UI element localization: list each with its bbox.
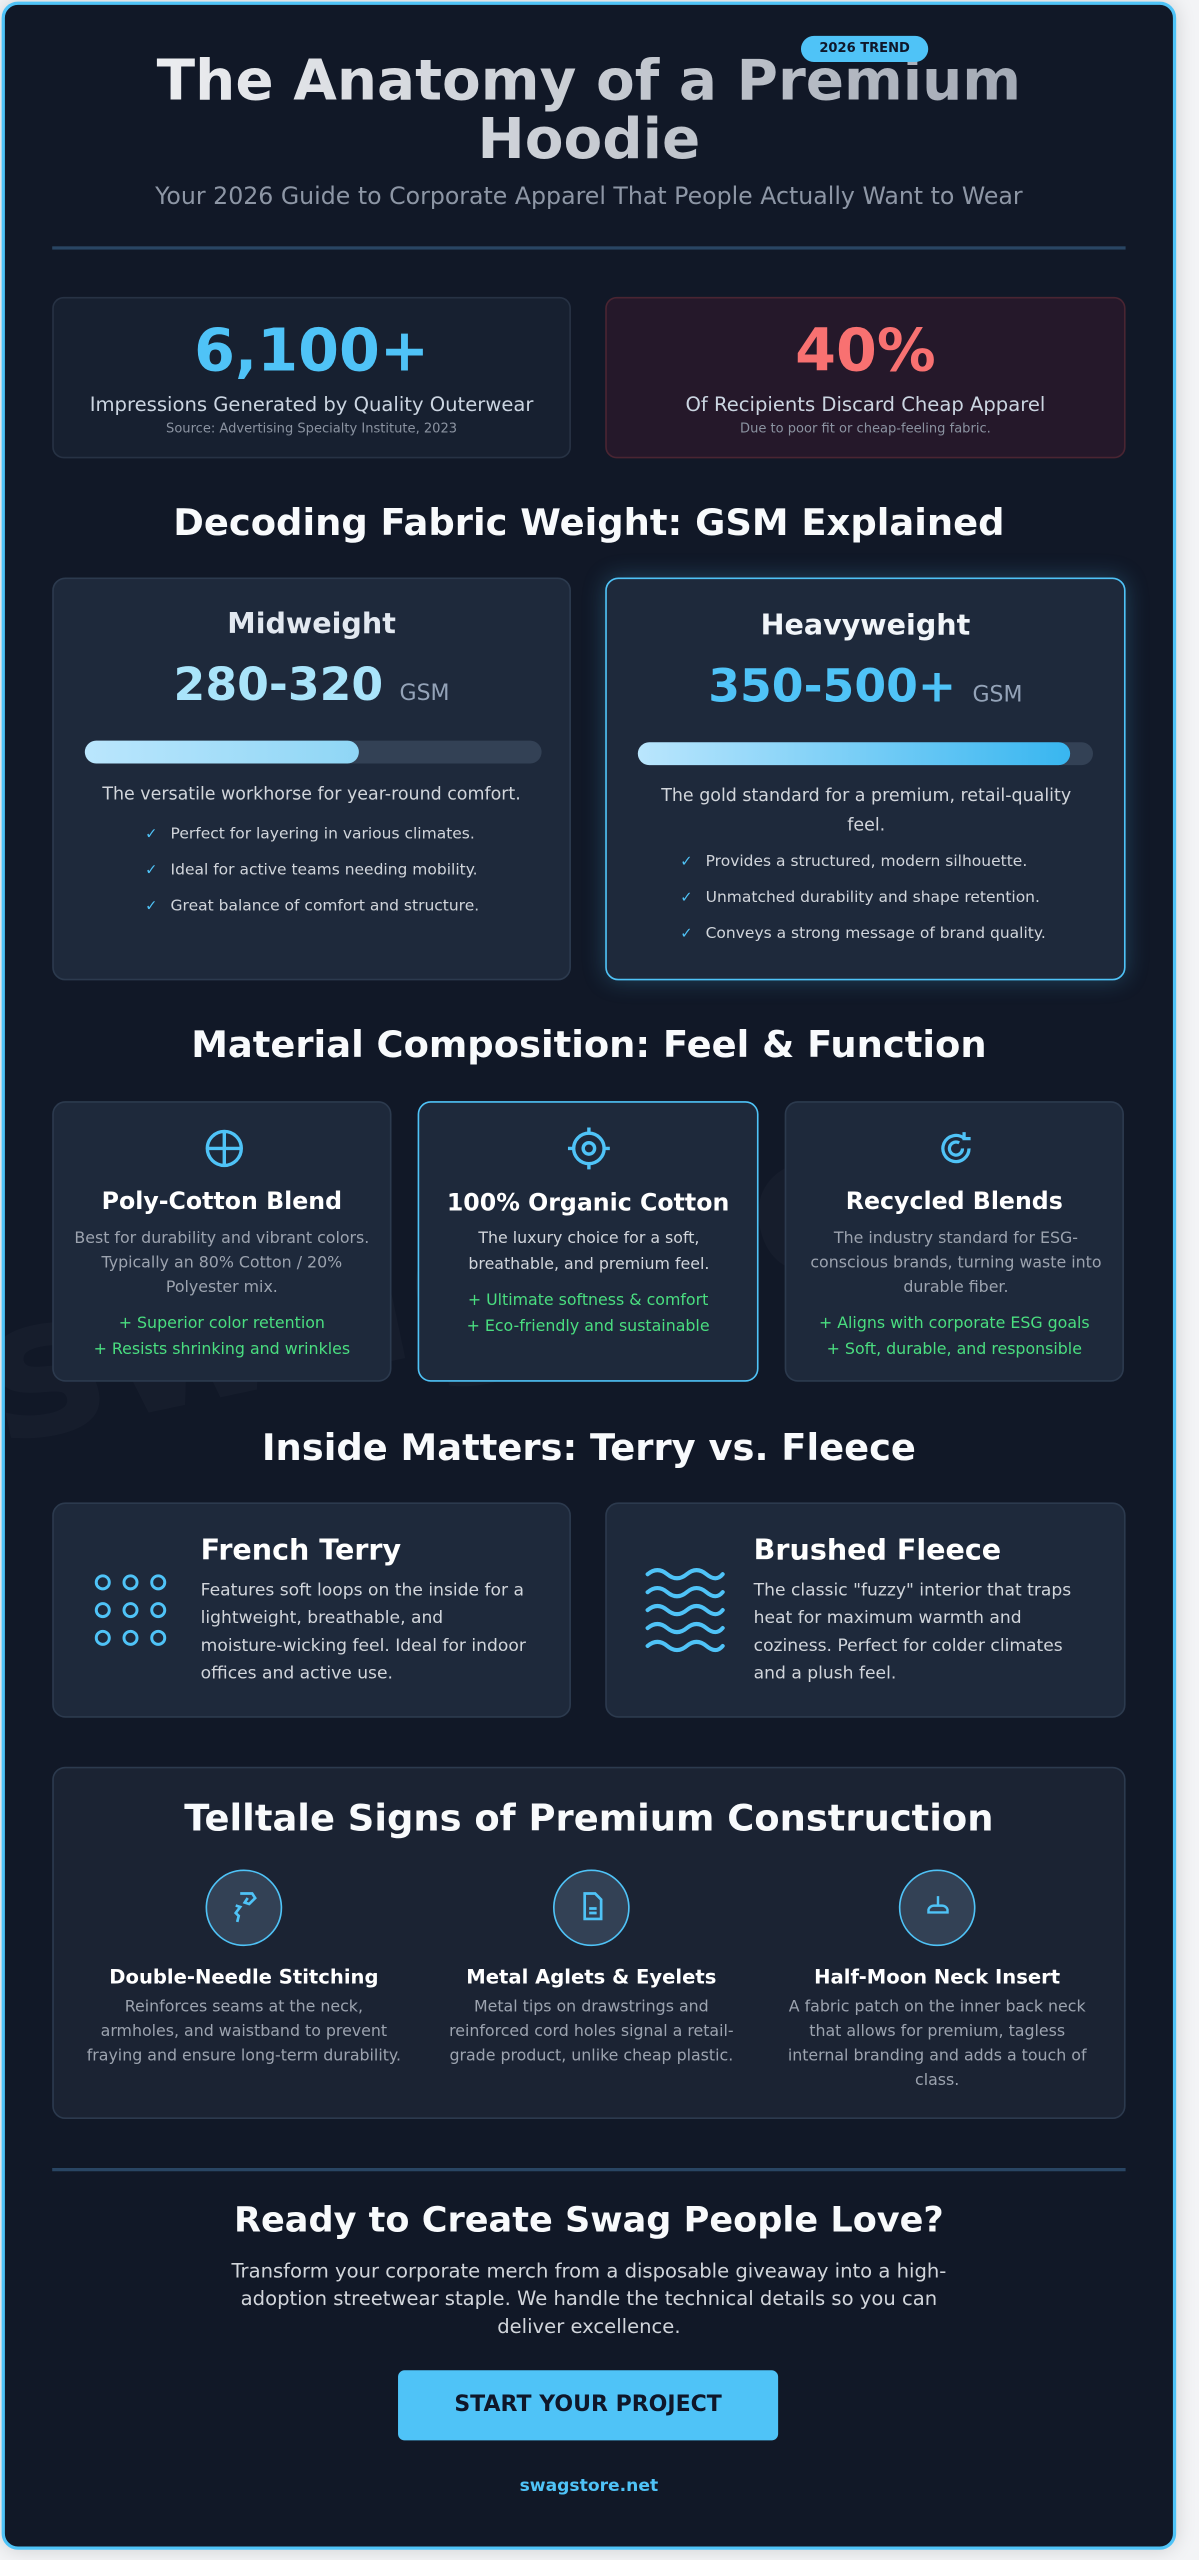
panel: midweight: ✓ Perfect for layering in various climates. bbox=[145, 825, 475, 843]
panel: recycled: + Soft, durable, and responsible bbox=[827, 1340, 1082, 1358]
item: stitching: Reinforces seams at the neck, bbox=[125, 1998, 363, 2016]
panel: organic cotton: + Ultimate softness & comfort bbox=[468, 1292, 708, 1310]
icon: poly bbox=[206, 1130, 243, 1168]
stat card: impressions: Impressions Generated by Quality Outerwear bbox=[90, 393, 533, 416]
panel: french terry: offices and active use. bbox=[201, 1664, 393, 1684]
icon: recycle bbox=[941, 1132, 971, 1164]
stat card: discard bbox=[605, 297, 1126, 458]
badge: 2026 TREND bbox=[819, 41, 910, 55]
icon: loops bbox=[94, 1574, 166, 1646]
item: stitching: fraying and ensure long-term durability. bbox=[87, 2047, 401, 2065]
subtitle: Your 2026 Guide to Corporate Apparel That People Actually Want to Wear bbox=[155, 184, 1023, 210]
heading: GSM: Decoding Fabric Weight: GSM Explained bbox=[173, 502, 1004, 545]
heading: terry vs fleece: Inside Matters: Terry vs. Fleece bbox=[262, 1427, 916, 1470]
panel: midweight: ✓ Ideal for active teams needing mobility. bbox=[145, 861, 478, 879]
panel: organic cotton: The luxury choice for a soft, breathable, and premium feel. bbox=[468, 1230, 709, 1273]
stat card: discard: Of Recipients Discard Cheap Apparel bbox=[685, 393, 1045, 416]
item: aglets: Metal Aglets & Eyelets bbox=[466, 1966, 716, 1989]
badge bbox=[801, 36, 928, 62]
stat card: discard: 40% bbox=[795, 318, 936, 385]
panel: brushed fleece: Brushed Fleece bbox=[754, 1535, 1001, 1568]
stat card: impressions: 6,100+ bbox=[194, 318, 429, 385]
panel: heavyweight: ✓ Provides a structured, modern silhouette. bbox=[680, 853, 1027, 871]
icon: organic bbox=[568, 1128, 610, 1170]
item: stitching bbox=[87, 1870, 401, 2065]
panel: poly-cotton: Poly-Cotton Blend bbox=[102, 1189, 342, 1215]
item: neck insert: A fabric patch on the inner back neck bbox=[789, 1998, 1086, 2016]
panel: brushed fleece bbox=[605, 1502, 1126, 1718]
panel: brushed fleece: coziness. Perfect for colder climates bbox=[754, 1636, 1063, 1656]
item: stitching: armholes, and waistband to prevent bbox=[101, 2023, 387, 2041]
panel: recycled bbox=[785, 1101, 1124, 1382]
panel: organic cotton: + Eco-friendly and sustainable bbox=[467, 1317, 710, 1335]
panel: midweight: The versatile workhorse for year-round comfort. bbox=[102, 783, 521, 804]
item: aglets: reinforced cord holes signal a retail- bbox=[449, 2023, 734, 2041]
item: neck insert: class. bbox=[915, 2072, 959, 2090]
panel: midweight bbox=[52, 577, 571, 980]
footer link: swagstore.net bbox=[520, 2476, 658, 2496]
panel: heavyweight: The gold standard for a premium, retail-quality feel. bbox=[661, 785, 1071, 835]
panel: recycled: Recycled Blends bbox=[846, 1189, 1063, 1215]
stat card: discard: Due to poor fit or cheap-feeling fabric. bbox=[740, 421, 991, 436]
item: stitching: Double-Needle Stitching bbox=[109, 1966, 378, 1989]
panel: heavyweight: 350-500+ GSM bbox=[708, 659, 1023, 713]
panel: midweight: ✓ Great balance of comfort and structure. bbox=[145, 897, 479, 915]
panel: poly-cotton: + Superior color retention bbox=[119, 1315, 325, 1333]
stat card: impressions: Source: Advertising Specialty Institute, 2023 bbox=[166, 421, 457, 436]
panel: poly-cotton bbox=[52, 1101, 392, 1382]
panel: french terry: French Terry bbox=[201, 1535, 401, 1568]
title: The Anatomy of a Premium Hoodie bbox=[157, 49, 1021, 173]
item: aglets: Metal tips on drawstrings and bbox=[474, 1998, 709, 2016]
heading: material: Material Composition: Feel & Function bbox=[191, 1024, 987, 1067]
panel: heavyweight: Heavyweight bbox=[761, 610, 970, 643]
panel: french terry: Features soft loops on the inside for a bbox=[201, 1581, 524, 1600]
panel: heavyweight bbox=[605, 577, 1126, 980]
stat card: impressions bbox=[52, 297, 571, 458]
panel: construction bbox=[52, 1767, 1126, 2119]
item: aglets: grade product, unlike cheap plastic. bbox=[449, 2047, 733, 2065]
panel: heavyweight: ✓ Unmatched durability and shape retention. bbox=[680, 889, 1040, 907]
panel: heavyweight: ✓ Conveys a strong message of brand quality. bbox=[680, 925, 1046, 943]
CTA button bbox=[398, 2370, 778, 2440]
panel: brushed fleece: and a plush feel. bbox=[754, 1664, 896, 1684]
panel: organic cotton: 100% Organic Cotton bbox=[447, 1191, 729, 1217]
panel: recycled: The industry standard for ESG-conscious brands, turning waste into durable fiber. bbox=[810, 1230, 1102, 1297]
panel: organic cotton bbox=[418, 1101, 759, 1382]
panel: french terry: lightweight, breathable, and bbox=[201, 1608, 443, 1628]
icon: waves bbox=[646, 1568, 725, 1652]
panel: poly-cotton: Best for durability and vibrant colors. Typically an 80% Cotton / 20% Polyester mix. bbox=[74, 1230, 369, 1297]
panel: recycled: + Aligns with corporate ESG goals bbox=[819, 1315, 1090, 1333]
panel: midweight: Midweight bbox=[227, 608, 396, 641]
item: neck insert: internal branding and adds a touch of bbox=[788, 2047, 1087, 2065]
item: neck insert: that allows for premium, tagless bbox=[809, 2023, 1065, 2041]
panel: brushed fleece: The classic "fuzzy" interior that traps bbox=[754, 1581, 1071, 1600]
panel: midweight: 280-320 GSM bbox=[174, 657, 450, 711]
item: neck insert bbox=[788, 1870, 1087, 2090]
item: neck insert: Half-Moon Neck Insert bbox=[814, 1966, 1060, 1989]
panel: french terry bbox=[52, 1502, 571, 1718]
panel: poly-cotton: + Resists shrinking and wrinkles bbox=[94, 1340, 350, 1358]
panel: brushed fleece: heat for maximum warmth and bbox=[754, 1608, 1022, 1628]
CTA button: START YOUR PROJECT bbox=[454, 2391, 722, 2418]
item: aglets bbox=[449, 1870, 734, 2065]
panel: french terry: moisture-wicking feel. Ideal for indoor bbox=[201, 1636, 526, 1656]
CTA text: Transform your corporate merch from a disposable giveaway into a high-adoption streetwear staple. We handle the technical details so you can deliver excellence. bbox=[231, 2259, 946, 2338]
CTA heading: Ready to Create Swag People Love? bbox=[234, 2201, 944, 2241]
panel: construction: Telltale Signs of Premium Construction bbox=[184, 1798, 993, 1840]
